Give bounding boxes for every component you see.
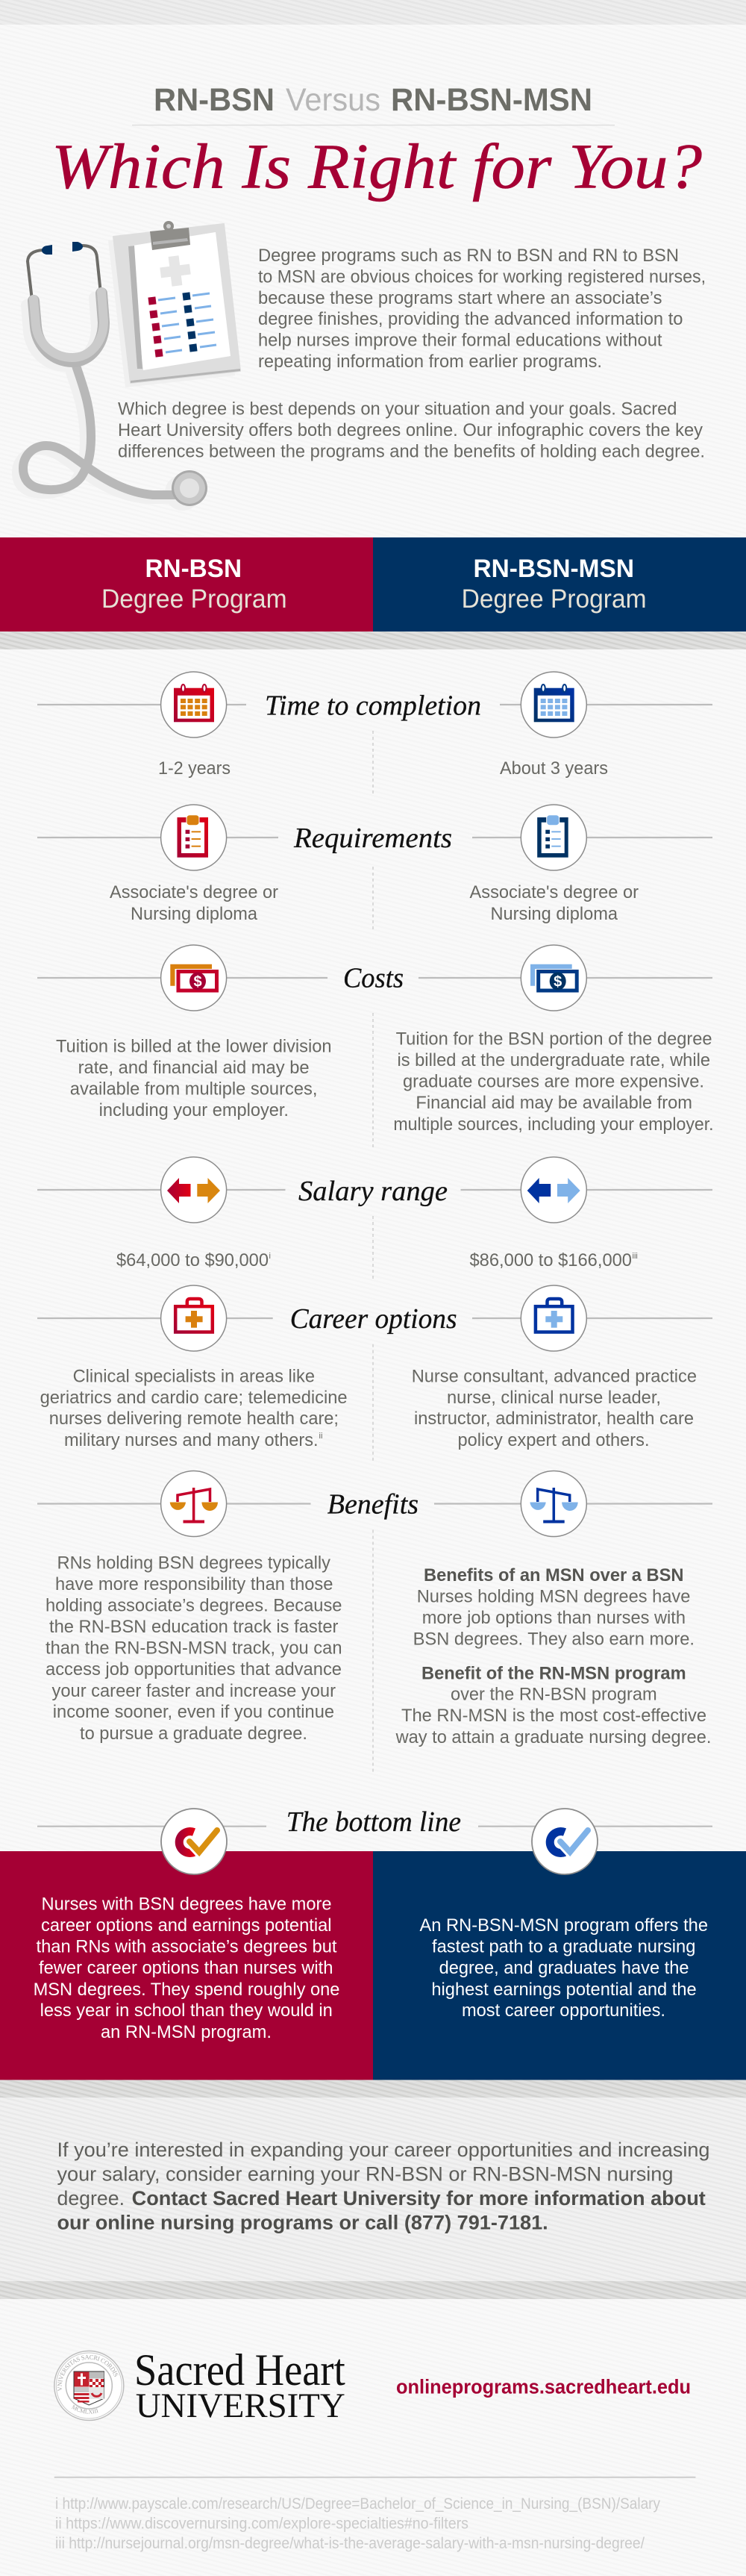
icon: blue banknotes: $ [554,973,562,990]
text: RN-BSN-MSN requirements: Nursing diploma [491,904,618,924]
text: RN-BSN costs: rate, and financial aid may be [78,1058,310,1078]
text: RN-BSN-MSN careers [412,1367,697,1450]
text: RN-BSN-MSN careers: nurse, clinical nurse leader, [447,1388,661,1408]
text: RN-BSN-MSN costs: is billed at the undergraduate rate, while [397,1050,710,1070]
panel: RN-BSN-MSN degree program header: Degree Program [462,584,647,614]
intro text: to MSN are obvious choices for working registered nurses, [258,266,706,287]
section: requirements [37,805,712,931]
wordmark: University: UNIVERSITY [136,2386,345,2425]
footnotes: i http://www.payscale.com/research/US/Degree=Bachelor_of_Science_in_Nursing_(BSN)/Salary [55,2495,660,2513]
text: RN-BSN-MSN costs [393,1029,714,1135]
icon: blue clipboard [521,805,586,870]
text: RN-BSN-MSN salary: $86,000 to $166,000 [470,1250,632,1270]
text: RN-BSN benefits: your career faster and increase your [52,1681,336,1701]
text: RN-BSN-MSN time: About 3 years [500,758,608,779]
icon: red check mark [161,1809,227,1874]
panel: RN-BSN-MSN bottom line: fastest path to a graduate nursing [432,1937,695,1957]
intro text: Which degree is best depends on your situation and your goals. Sacred [118,399,677,420]
text: RN-BSN-MSN costs: graduate courses are more expensive. [403,1072,704,1092]
panel: RN-BSN bottom line: than RNs with associate’s degrees but [36,1937,337,1957]
heading: RN-BSN Versus RN-BSN-MSN: RN-BSN [154,82,275,118]
heading: costs: Costs [343,963,404,994]
text: RN-BSN-MSN benefits: Nurses holding MSN degrees have [417,1586,690,1606]
icon: university seal [54,2350,124,2421]
text: RN-BSN careers: Clinical specialists in areas like [73,1367,315,1387]
icon: red and orange arrows [161,1157,227,1223]
call to action text: Contact Sacred Heart University for more information about [132,2187,706,2209]
heading: RN-BSN Versus RN-BSN-MSN: Versus [286,82,380,118]
icon: university seal: VNIVERSITAS SACRI CORDIS [57,2354,118,2392]
title: Which Is Right for You?: Which Is Right for You? [51,131,702,202]
text: RN-BSN-MSN costs: multiple sources, including your employer. [393,1114,714,1135]
text: RN-BSN benefits: income sooner, even if you continue [53,1702,334,1722]
text: RN-BSN benefits: holding associate’s degrees. Because [46,1596,342,1615]
footnotes: ii https://www.discovernursing.com/explore-specialties#no-filters [55,2516,468,2533]
heading: benefits: Benefits [327,1488,419,1520]
icon: red clipboard [161,805,227,870]
text: RN-BSN requirements: Associate's degree or [110,882,278,902]
intro text: degree finishes, providing the advanced information to [258,309,683,329]
call to action text: your salary, consider earning your RN-BSN or RN-BSN-MSN nursing [57,2163,673,2186]
text: RN-BSN careers: ii [319,1432,322,1441]
intro text: help nurses improve their formal educations without [258,331,662,351]
illustration: stethoscope [16,242,207,511]
text: RN-BSN benefits: the RN-BSN education track is faster [49,1617,338,1637]
icon: red calendar [161,672,227,737]
section: salary range [37,1157,712,1280]
panel: RN-BSN degree program header [0,537,373,631]
text: RN-BSN-MSN benefits: Benefits of an MSN over a BSN [424,1565,683,1585]
panel: RN-BSN bottom line: an RN-MSN program. [101,2022,272,2042]
icon: blue calendar [521,672,586,737]
intro text: because these programs start where an associate’s [258,288,662,308]
section: the bottom line [0,1806,746,2080]
text: RN-BSN-MSN requirements: Associate's degree or [470,882,639,902]
heading: the bottom line: The bottom line [286,1806,461,1838]
panel: RN-BSN-MSN bottom line: An RN-BSN-MSN program offers the [419,1915,708,1936]
website link: onlineprograms.sacredheart.edu [396,2376,691,2398]
text: RN-BSN time: 1-2 years [158,758,231,779]
text: RN-BSN costs: available from multiple sources, [70,1079,317,1099]
text: RN-BSN salary: i [269,1252,271,1261]
text: RN-BSN benefits: have more responsibility than those [55,1574,333,1594]
call to action text: degree. [57,2187,125,2209]
illustration: clipboard [108,221,240,387]
heading: time to completion: Time to completion [265,690,481,721]
text: RN-BSN benefits [46,1553,342,1744]
panel: RN-BSN-MSN bottom line: most career opportunities. [462,2000,665,2021]
icon: blue scales [521,1471,586,1536]
logo: Sacred Heart University [54,2345,345,2425]
text: RN-BSN requirements: Nursing diploma [131,904,258,924]
text: RN-BSN-MSN benefits: The RN-MSN is the most cost-effective [401,1706,706,1726]
section: costs [37,945,714,1150]
call to action text: If you’re interested in expanding your career opportunities and increasing [57,2139,710,2161]
icon: red banknotes [161,945,227,1011]
icon: blue check mark [532,1809,598,1874]
text: RN-BSN careers: geriatrics and cardio care; telemedicine [40,1388,348,1408]
text: RN-BSN-MSN costs: Tuition for the BSN portion of the degree [396,1029,712,1050]
text: RN-BSN salary: $64,000 to $90,000 [116,1250,269,1270]
text: RN-BSN-MSN benefits: over the RN-BSN program [451,1685,657,1705]
panel: RN-BSN bottom line: career options and earnings potential [41,1915,331,1936]
icon: red medical case [161,1285,227,1351]
text: RN-BSN-MSN careers: Nurse consultant, advanced practice [412,1367,697,1387]
intro text: differences between the programs and the benefits of holding each degree. [118,442,705,461]
text: RN-BSN-MSN costs: Financial aid may be available from [416,1093,692,1113]
text: RN-BSN benefits: RNs holding BSN degrees typically [57,1553,330,1574]
call to action text: our online nursing programs or call (877) 791-7181. [57,2212,548,2234]
panel: RN-BSN bottom line: MSN degrees. They spend roughly one [34,1980,339,2000]
icon: blue medical case [521,1285,586,1351]
footnotes: iii http://nursejournal.org/msn-degree/what-is-the-average-salary-with-a-msn-nursing-degree/ [55,2535,645,2552]
intro text: repeating information from earlier programs. [258,352,602,372]
text: RN-BSN costs: including your employer. [99,1100,289,1120]
icon: blue banknotes [521,945,586,1011]
text: RN-BSN careers [40,1367,348,1450]
text: RN-BSN-MSN benefits: BSN degrees. They also earn more. [413,1630,695,1650]
text: RN-BSN-MSN careers: instructor, administrator, health care [414,1409,694,1429]
intro text [118,246,706,461]
text: RN-BSN-MSN benefits: Benefit of the RN-MSN program [421,1663,686,1684]
section: benefits [37,1471,712,1774]
icon: red scales [161,1471,227,1536]
panel: RN-BSN degree program header: Degree Program [101,584,287,614]
text: RN-BSN-MSN benefits: more job options than nurses with [422,1608,686,1628]
section: time to completion [37,672,712,795]
heading: requirements: Requirements [293,823,452,854]
wordmark: Sacred Heart: Sacred Heart [134,2345,345,2395]
icon: red banknotes: $ [193,973,202,990]
heading: salary range: Salary range [298,1176,448,1207]
panel: RN-BSN-MSN bottom line [373,1851,746,2080]
panel: RN-BSN-MSN bottom line: highest earnings potential and the [431,1980,697,2000]
text: RN-BSN costs [56,1037,331,1120]
intro text: Degree programs such as RN to BSN and RN to BSN [258,246,679,266]
panel: RN-BSN-MSN degree program header: RN-BSN-MSN [473,555,634,583]
text: RN-BSN benefits: access job opportunities that advance [46,1659,342,1680]
intro text: Heart University offers both degrees online. Our infographic covers the key [118,420,703,440]
panel: RN-BSN bottom line [0,1851,373,2080]
text: RN-BSN-MSN benefits [395,1565,711,1747]
text: RN-BSN benefits: to pursue a graduate degree. [80,1724,307,1744]
panel: RN-BSN degree program header: RN-BSN [145,555,242,583]
text: RN-BSN careers: military nurses and many others. [64,1430,319,1450]
panel: RN-BSN bottom line: fewer career options than nurses with [39,1958,333,1978]
text: RN-BSN careers: nurses delivering remote health care; [49,1409,339,1429]
icon: blue arrows [521,1157,586,1223]
text: RN-BSN costs: Tuition is billed at the lower division [56,1037,331,1057]
call to action text [57,2139,710,2234]
panel: RN-BSN bottom line: less year in school than they would in [40,2000,333,2021]
panel: RN-BSN-MSN degree program header [373,537,746,631]
heading: RN-BSN Versus RN-BSN-MSN [132,82,615,125]
text: RN-BSN requirements [110,882,278,924]
panel: RN-BSN bottom line: Nurses with BSN degrees have more [42,1894,331,1914]
heading: career options: Career options [290,1303,457,1335]
text: RN-BSN-MSN benefits: way to attain a graduate nursing degree. [395,1727,711,1747]
text: RN-BSN benefits: than the RN-BSN-MSN track, you can [46,1638,342,1659]
icon: university seal: MCMLXIII [72,2405,98,2414]
section: career options [37,1285,712,1461]
text: RN-BSN-MSN careers: policy expert and others. [458,1430,649,1450]
panel: RN-BSN-MSN bottom line: degree, and graduates have the [439,1958,689,1978]
text: RN-BSN-MSN requirements [470,882,639,924]
footnotes [55,2495,660,2552]
heading: RN-BSN Versus RN-BSN-MSN: RN-BSN-MSN [391,82,592,118]
text: RN-BSN-MSN salary: iii [633,1252,638,1261]
